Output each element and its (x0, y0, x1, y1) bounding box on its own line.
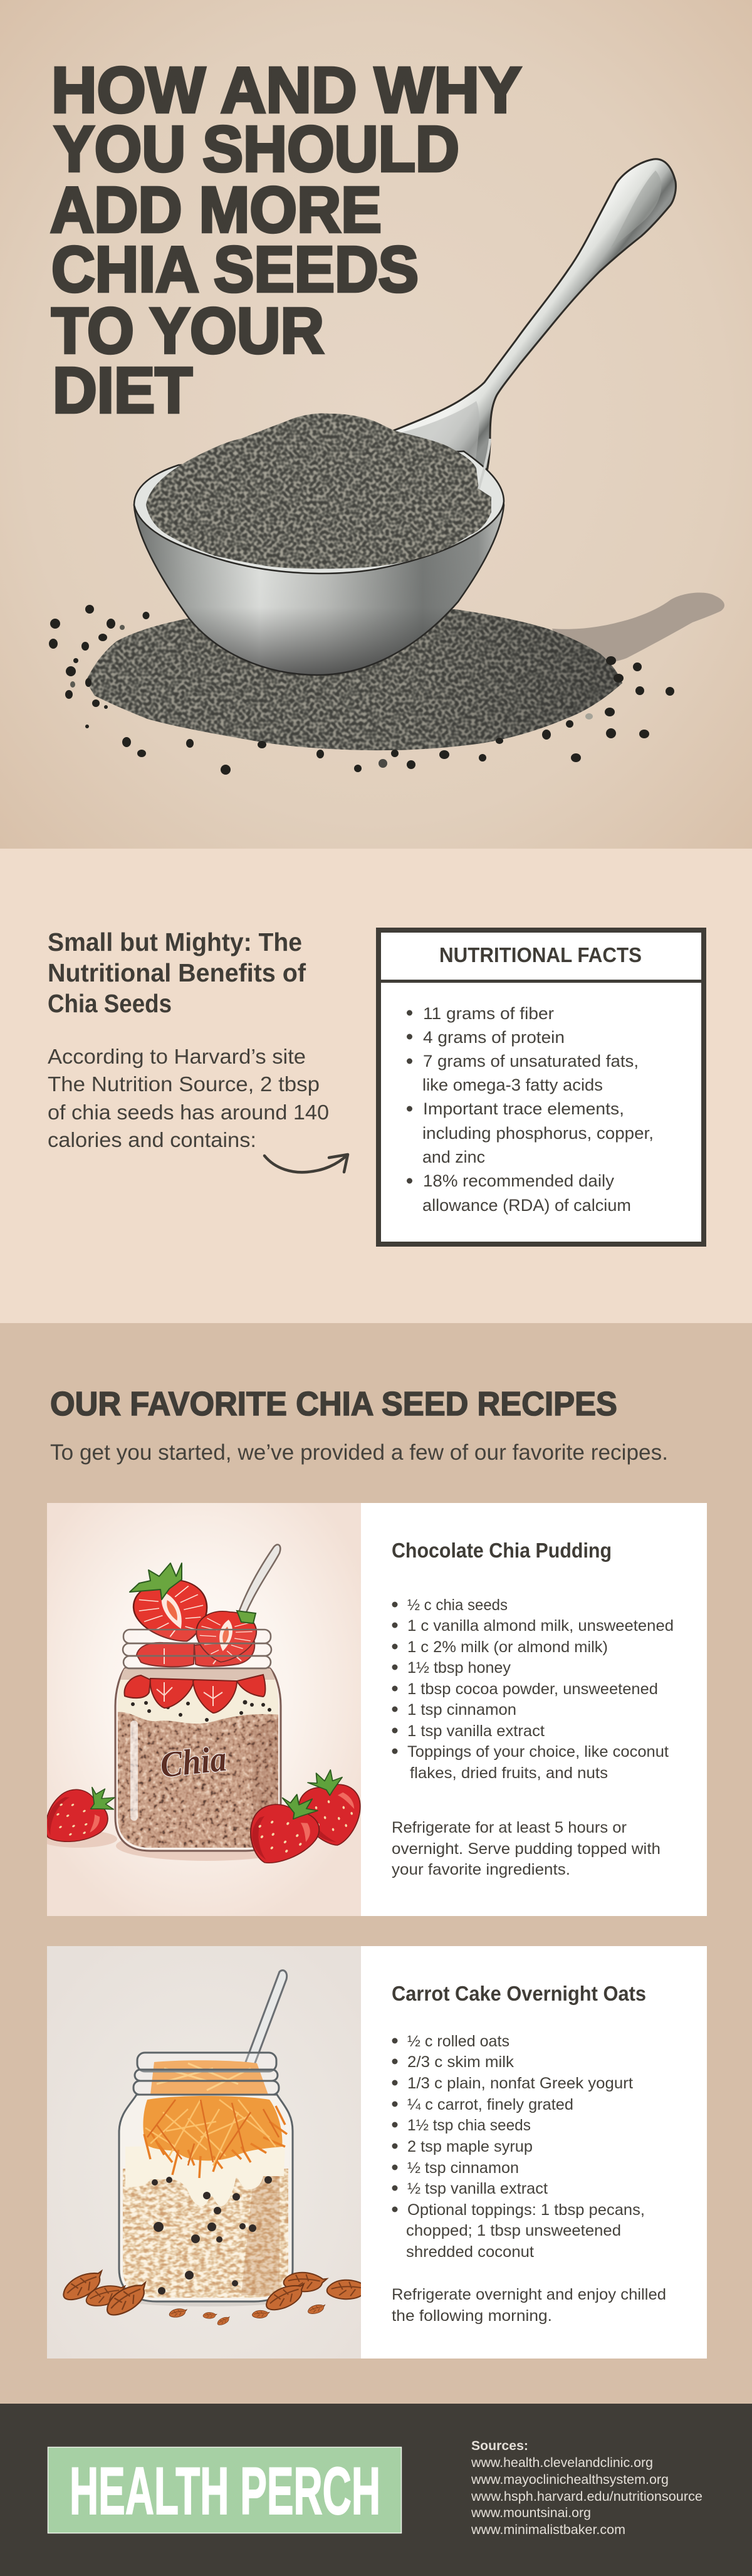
logo: health perch: HEALTH PERCH (70, 2453, 380, 2528)
recipe text: chocolate chia pudding: your favorite ingredients. (392, 1861, 570, 1878)
recipe text: carrot cake overnight oats: 1½ tsp chia seeds (407, 2117, 531, 2134)
facts list: 18% recommended daily (423, 1171, 614, 1190)
recipe text: carrot cake overnight oats: 1/3 c plain, nonfat Greek yogurt (407, 2075, 633, 2092)
intro paragraph: of chia seeds has around 140 (48, 1101, 329, 1124)
illustration: strawberry chia jar (29, 1503, 368, 1916)
facts list: Important trace elements, (423, 1099, 624, 1118)
shredded carrot (143, 2060, 287, 2178)
recipe text: chocolate chia pudding: 1½ tbsp honey (407, 1659, 511, 1677)
panel: hero (0, 0, 752, 849)
spoon (394, 159, 676, 495)
recipe text: carrot cake overnight oats: the following morning. (392, 2307, 552, 2325)
panel: recipes (47, 1391, 707, 2359)
recipe text: carrot cake overnight oats: chopped; 1 tbsp unsweetened (406, 2222, 621, 2239)
heading: small but mighty: Small but Mighty: The (48, 928, 302, 956)
jar lid (133, 2053, 279, 2095)
recipe text: carrot cake overnight oats (392, 1982, 666, 2325)
spoon shadow (552, 593, 724, 663)
recipe text: carrot cake overnight oats: ½ c rolled oats (407, 2033, 509, 2050)
seed pile (81, 602, 627, 755)
facts list: 7 grams of unsaturated fats, (423, 1052, 639, 1071)
heading: small but mighty: Chia Seeds (48, 989, 172, 1018)
facts list: and zinc (422, 1148, 485, 1166)
sources: www.minimalistbaker.com (471, 2523, 625, 2537)
recipe text: chocolate chia pudding: ½ c chia seeds (407, 1596, 508, 1614)
title: ADD MORE (50, 174, 382, 246)
recipe text: chocolate chia pudding: Refrigerate for at least 5 hours or (392, 1819, 627, 1836)
heading: recipes: OUR FAVORITE CHIA SEED RECIPES (50, 1385, 617, 1423)
recipe text: chocolate chia pudding: overnight. Serve pudding topped with (392, 1840, 661, 1858)
panel: nutritional facts box (379, 930, 704, 1244)
heading: small but mighty: Nutritional Benefits of (48, 958, 306, 987)
recipe text: chocolate chia pudding: Toppings of your choice, like coconut (407, 1743, 669, 1761)
panel: nutritional benefits (0, 849, 752, 1323)
recipe text: carrot cake overnight oats: ½ tsp cinnamon (407, 2159, 519, 2177)
facts list: like omega-3 fatty acids (422, 1076, 603, 1094)
recipe text: chocolate chia pudding: flakes, dried fruits, and nuts (410, 1764, 608, 1782)
recipe text: chocolate chia pudding: 1 c 2% milk (or almond milk) (407, 1638, 608, 1656)
recipe text: carrot cake overnight oats: ½ tsp vanilla extract (407, 2180, 548, 2197)
title: HOW AND WHY (51, 54, 521, 126)
sources: www.hsph.harvard.edu/nutritionsource (471, 2490, 702, 2504)
pecans (60, 2268, 370, 2326)
recipe text: chocolate chia pudding: 1 c vanilla almond milk, unsweetened (407, 1617, 674, 1635)
recipe text: carrot cake overnight oats: 2 tsp maple syrup (407, 2138, 533, 2155)
card: carrot cake overnight oats (47, 1946, 707, 2359)
recipes intro: To get you started, we’ve provided a few of our favorite recipes. (50, 1440, 668, 1465)
intro paragraph (48, 1045, 329, 1151)
intro paragraph: calories and contains: (48, 1128, 256, 1151)
arrow (264, 1154, 348, 1172)
seeds in bowl (141, 407, 498, 573)
facts heading: NUTRITIONAL FACTS (439, 943, 642, 966)
intro paragraph: According to Harvard’s site (48, 1045, 306, 1068)
title: YOU SHOULD (54, 113, 459, 185)
facts list: allowance (RDA) of calcium (422, 1196, 631, 1215)
sources: Sources: (471, 2439, 528, 2453)
recipe text: chocolate chia pudding: 1 tsp cinnamon (407, 1701, 516, 1719)
sources: www.mayoclinichealthsystem.org (471, 2473, 669, 2487)
jar label: Chia (158, 1738, 229, 1785)
recipe text: carrot cake overnight oats: Refrigerate overnight and enjoy chilled (392, 2286, 666, 2303)
sources: www.health.clevelandclinic.org (471, 2456, 653, 2470)
recipe text: chocolate chia pudding: 1 tbsp cocoa powder, unsweetened (407, 1680, 658, 1698)
recipe text: carrot cake overnight oats: 2/3 c skim milk (407, 2053, 514, 2071)
scattered chia seeds (49, 605, 674, 775)
title (50, 54, 521, 426)
recipe text: chocolate chia pudding: 1 tsp vanilla extract (407, 1722, 545, 1740)
recipe text: chocolate chia pudding: Chocolate Chia Pudding (392, 1539, 612, 1562)
title: DIET (53, 354, 192, 426)
facts list: 4 grams of protein (423, 1028, 565, 1047)
recipe text: carrot cake overnight oats: ¼ c carrot, finely grated (407, 2096, 573, 2113)
illustration: carrot oats jar (47, 1946, 370, 2359)
strawberries beside jar (29, 1766, 368, 1874)
recipe text: carrot cake overnight oats: shredded coconut (406, 2243, 534, 2261)
heading: small but mighty (48, 928, 306, 1018)
title: TO YOUR (51, 295, 324, 367)
sources (471, 2439, 702, 2537)
sources: www.mountsinai.org (471, 2506, 591, 2520)
bowl (134, 451, 504, 675)
facts list (407, 1004, 654, 1215)
card: chocolate chia pudding (29, 1503, 707, 1916)
facts list: 11 grams of fiber (423, 1004, 554, 1023)
recipe text: carrot cake overnight oats: Carrot Cake Overnight Oats (392, 1982, 646, 2005)
title: CHIA SEEDS (51, 233, 419, 305)
intro paragraph: The Nutrition Source, 2 tbsp (48, 1072, 320, 1096)
recipe text: chocolate chia pudding (392, 1539, 674, 1878)
panel: footer (0, 2404, 752, 2576)
recipe text: carrot cake overnight oats: Optional toppings: 1 tbsp pecans, (407, 2201, 645, 2219)
facts list: including phosphorus, copper, (422, 1124, 654, 1143)
logo: health perch (48, 2447, 401, 2533)
